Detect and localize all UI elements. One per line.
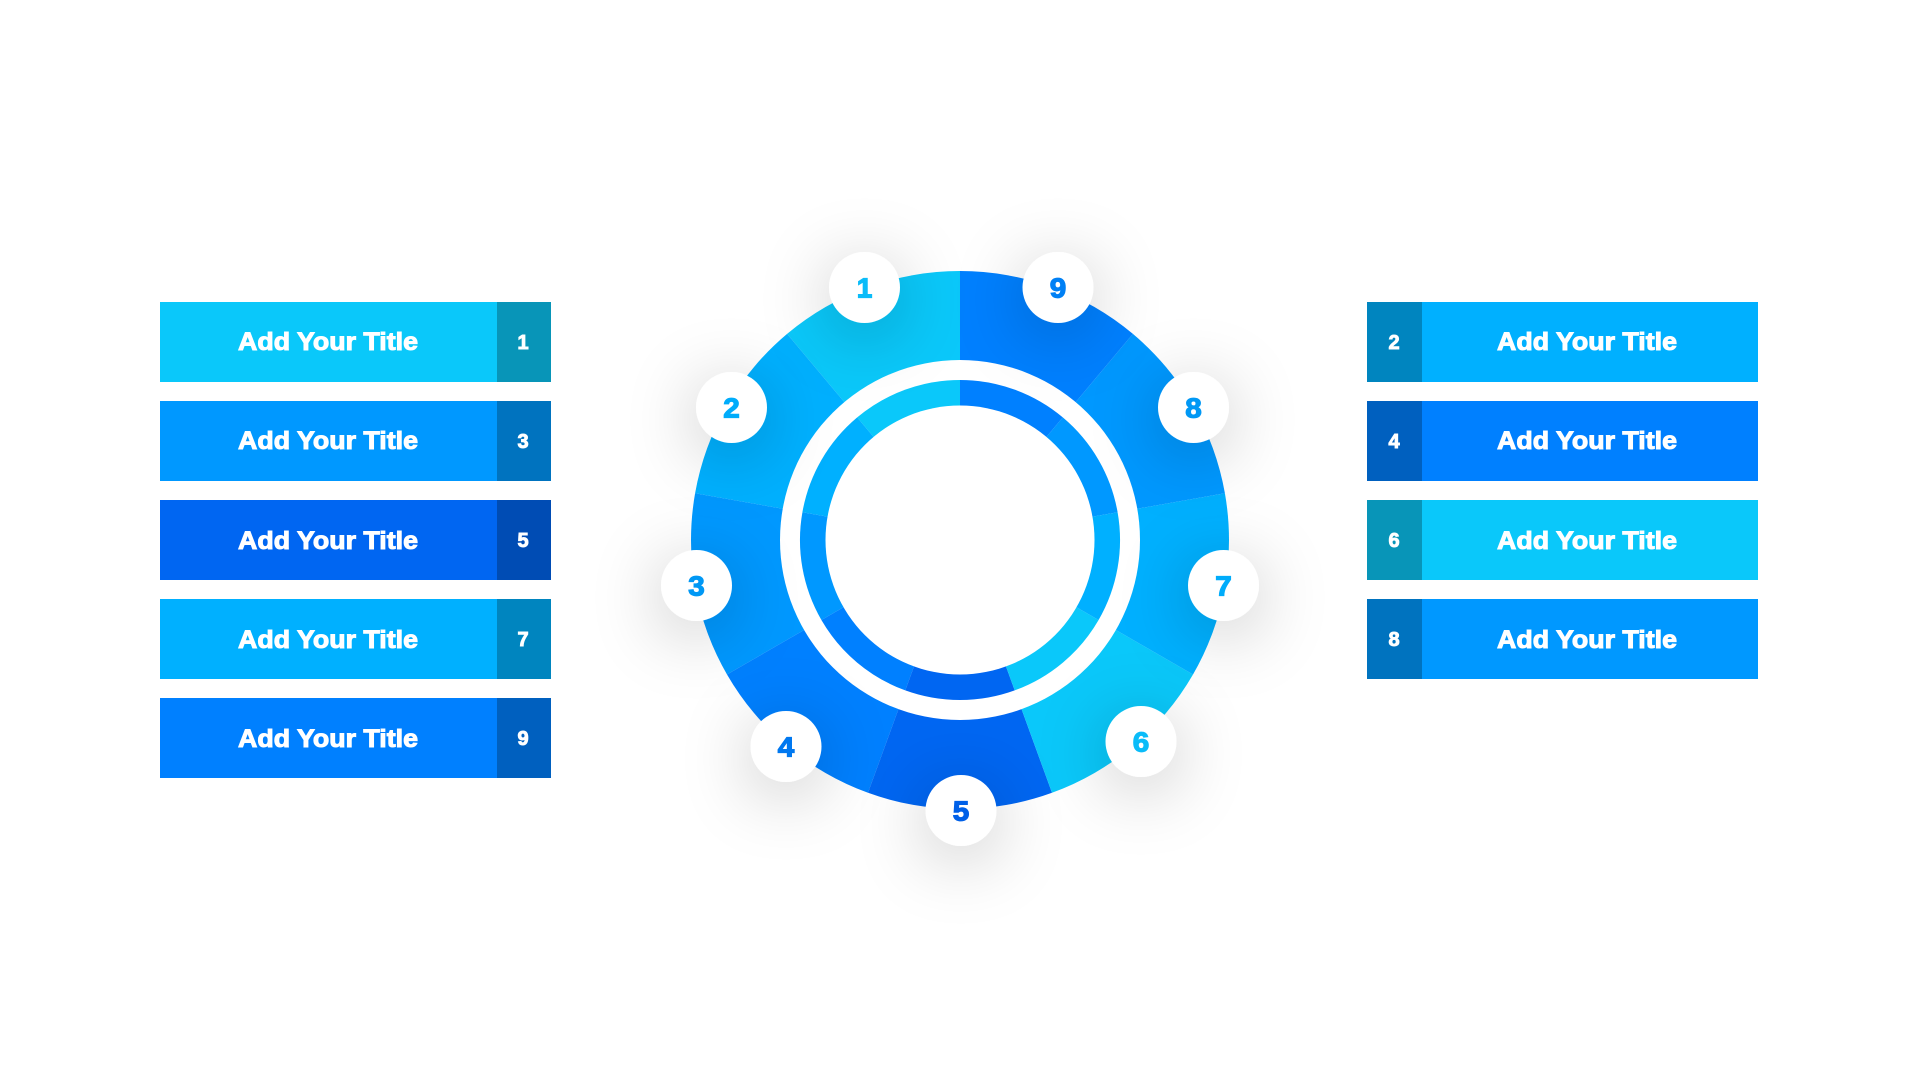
inner ring segments bbox=[800, 380, 1120, 700]
segment 9 bbox=[960, 271, 1133, 540]
badge 1 bbox=[829, 252, 900, 323]
bar: title 8 bbox=[1367, 599, 1758, 679]
white separator ring bbox=[780, 360, 1140, 720]
inner segment 7 bbox=[960, 512, 1120, 620]
bar: title 2: Add Your Title bbox=[1497, 328, 1677, 356]
bar: title 3: 3 bbox=[517, 431, 529, 453]
bar: title 6: Add Your Title bbox=[1497, 527, 1677, 555]
bar: title 2 bbox=[1367, 302, 1758, 382]
badge 6: 6 bbox=[1133, 726, 1149, 758]
bar: title 2: 2 bbox=[1388, 332, 1400, 354]
badge 8: 8 bbox=[1185, 392, 1202, 424]
inner segment 4 bbox=[821, 540, 960, 690]
bar: title 6 bbox=[1367, 500, 1758, 580]
bar: title 4: Add Your Title bbox=[1497, 427, 1677, 455]
segment 8 bbox=[960, 334, 1225, 540]
bar: title 7: Add Your Title bbox=[238, 626, 418, 654]
outer ring segments bbox=[691, 271, 1229, 809]
inner segment 8 bbox=[960, 417, 1118, 540]
wheel bbox=[691, 271, 1229, 809]
badge 3 bbox=[661, 550, 732, 621]
segment 5 bbox=[868, 540, 1052, 809]
number badges bbox=[661, 252, 1259, 846]
badge 9: 9 bbox=[1050, 272, 1066, 304]
bar: title 7: 7 bbox=[517, 629, 529, 651]
bar: title 1: Add Your Title bbox=[238, 328, 418, 356]
inner segment 6 bbox=[960, 540, 1099, 690]
badge 2 bbox=[696, 372, 767, 443]
bar: title 9: Add Your Title bbox=[238, 725, 418, 753]
bar: title 9 bbox=[160, 698, 551, 778]
badge 4 bbox=[750, 711, 822, 782]
badge 1: 1 bbox=[857, 272, 872, 304]
bar: title 3 bbox=[160, 401, 551, 481]
badge 5: 5 bbox=[953, 796, 969, 826]
center hole bbox=[826, 406, 1094, 674]
bar: title 5: 5 bbox=[517, 530, 529, 552]
left title bars bbox=[160, 302, 551, 778]
bar: title 4 bbox=[1367, 401, 1758, 481]
inner segment 3 bbox=[800, 512, 960, 620]
bar: title 8: 8 bbox=[1388, 629, 1400, 651]
inner segment 2 bbox=[802, 417, 960, 540]
bar: title 1 bbox=[160, 302, 551, 382]
right title bars bbox=[1367, 302, 1758, 679]
badge 5 bbox=[926, 775, 996, 846]
bar: title 3: Add Your Title bbox=[238, 427, 418, 455]
inner segment 5 bbox=[905, 540, 1015, 700]
bar: title 9: 9 bbox=[517, 728, 529, 750]
inner segment 1 bbox=[857, 380, 960, 540]
badge 8 bbox=[1158, 372, 1229, 443]
badge 7: 7 bbox=[1215, 570, 1232, 602]
segment 7 bbox=[960, 493, 1229, 674]
segment 4 bbox=[727, 540, 960, 793]
segment 2 bbox=[695, 334, 960, 540]
bar: title 4: 4 bbox=[1388, 431, 1400, 453]
badge 3: 3 bbox=[688, 570, 705, 602]
bar: title 7 bbox=[160, 599, 551, 679]
badge 2: 2 bbox=[723, 392, 740, 424]
bar: title 8: Add Your Title bbox=[1497, 626, 1677, 654]
segment 6 bbox=[960, 540, 1193, 793]
badge 7 bbox=[1188, 550, 1259, 621]
inner segment 9 bbox=[960, 380, 1063, 540]
bar: title 6: 6 bbox=[1388, 530, 1400, 552]
badge 9 bbox=[1022, 252, 1094, 323]
badge 6 bbox=[1106, 706, 1176, 777]
bar: title 5 bbox=[160, 500, 551, 580]
segment 1 bbox=[787, 271, 960, 540]
bar: title 1: 1 bbox=[517, 332, 529, 354]
segment 3 bbox=[691, 493, 960, 674]
badge 4: 4 bbox=[778, 732, 795, 762]
bar: title 5: Add Your Title bbox=[238, 527, 418, 555]
